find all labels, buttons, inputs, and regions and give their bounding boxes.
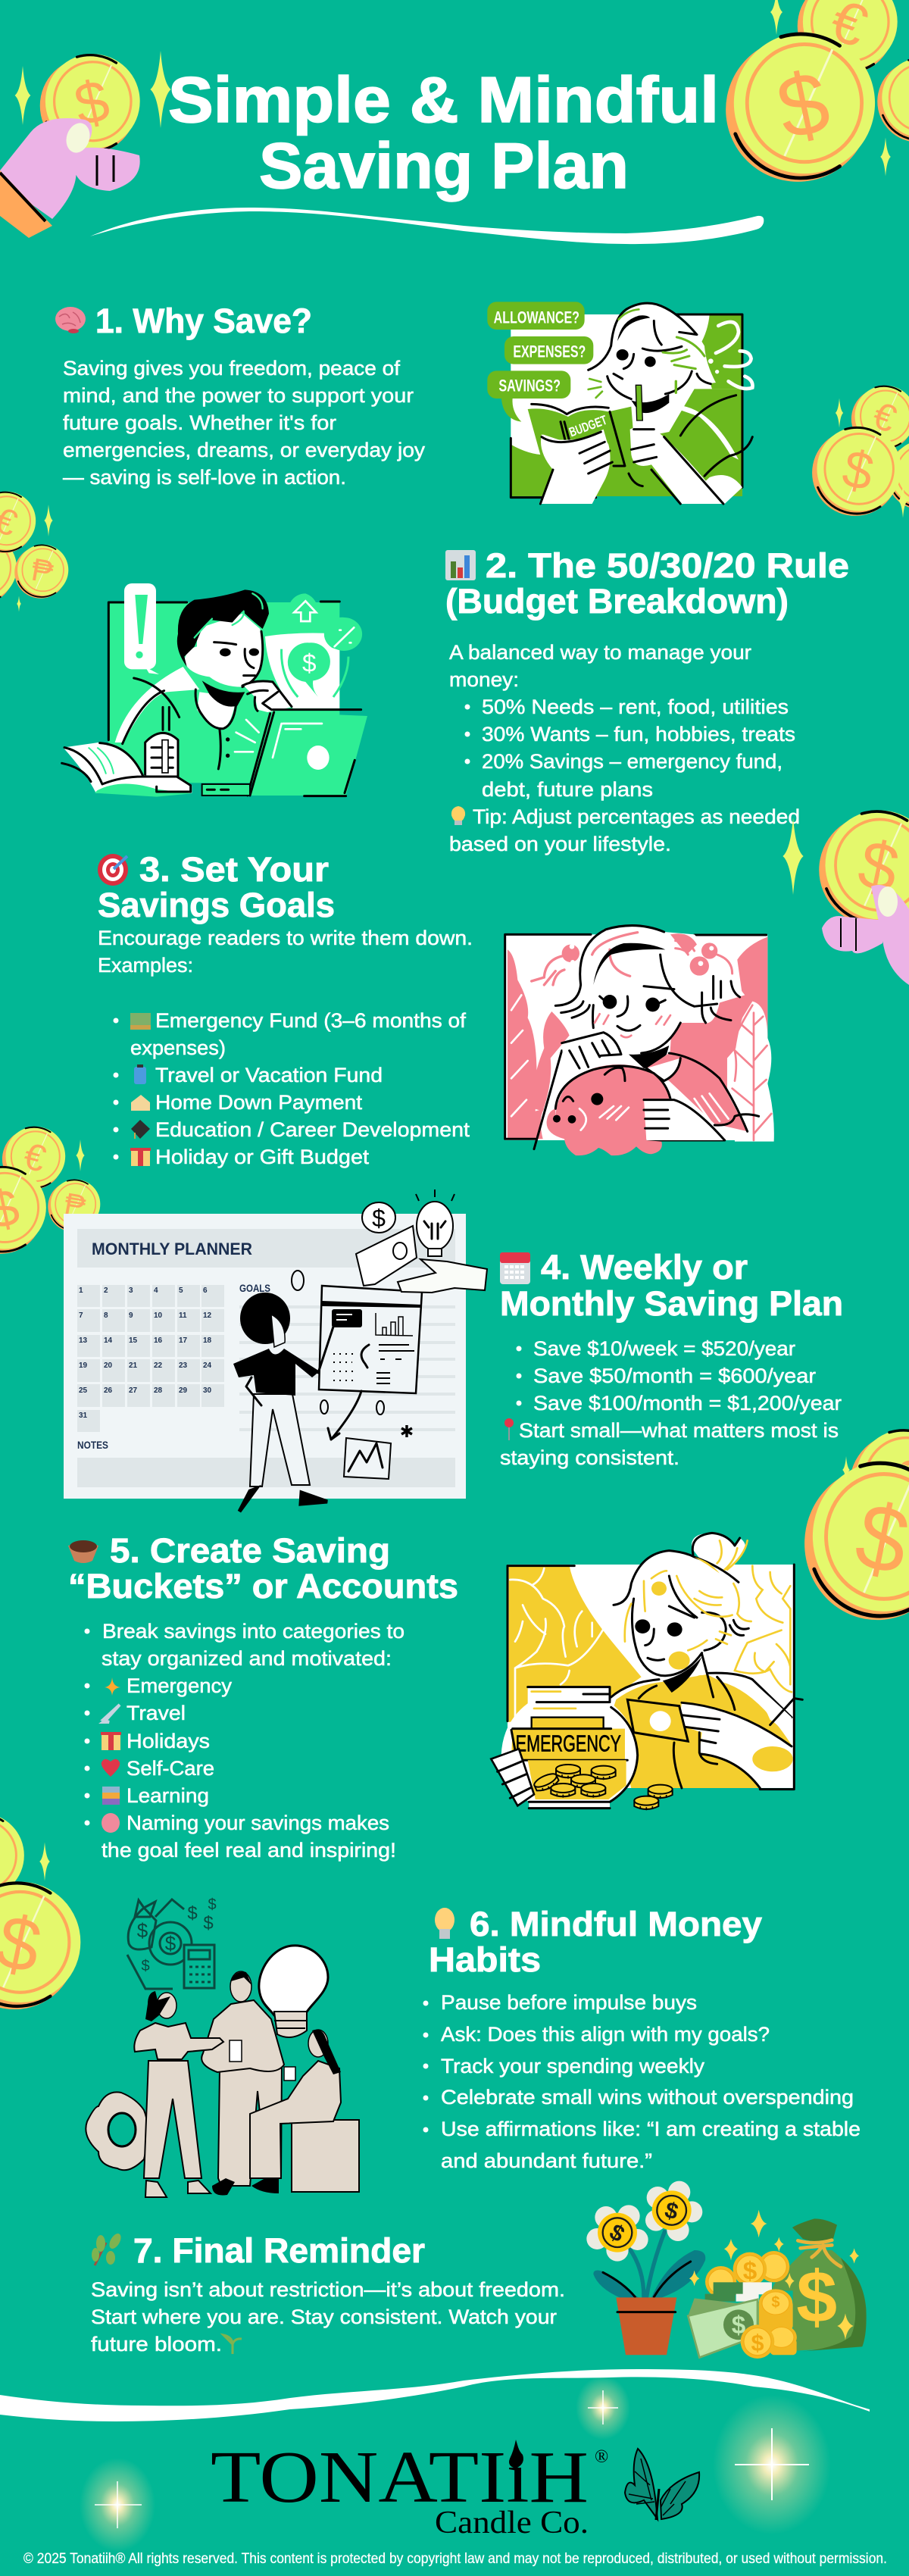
calendar numbers: 24 [203,1361,212,1370]
coins: right of section 5 [804,1429,909,1620]
head [555,925,745,1068]
monthly planner card [64,1214,466,1499]
icon: target [98,854,128,886]
coins: top left with hand: $ [69,67,114,139]
section 5: saving buckets [68,1531,458,1862]
list: Emergency [127,1674,233,1697]
body text: future goals. Whether it's for [63,411,336,434]
head [614,1533,751,1697]
notes [77,1439,455,1487]
calendar numbers: 3 [129,1286,133,1295]
gold coins and bills: $ [751,2331,764,2356]
gold coins and bills: $ [771,2294,780,2311]
calendar numbers: 28 [154,1386,163,1395]
list: Learning [127,1784,209,1807]
list: Ask: Does this align with my goals? [441,2023,770,2046]
calendar numbers: 13 [79,1336,88,1345]
calendar numbers: 21 [129,1361,138,1370]
body text and list [449,641,800,855]
money icons [127,1896,217,1989]
flowers: $ [662,2197,681,2225]
heading [500,1248,843,1323]
calendar numbers: 5 [179,1286,183,1295]
body text and list: money: [449,668,519,691]
heading [429,1905,762,1979]
section 7: final reminder [91,2231,565,2356]
hand [242,680,292,712]
calendar numbers: 25 [79,1386,88,1395]
heading: Habits [429,1940,541,1979]
calendar numbers: 23 [179,1361,188,1370]
section 4: weekly or monthly plan [500,1248,843,1469]
book: BUDGET [567,412,609,439]
calendar numbers: 6 [203,1286,208,1295]
coins: left of section 4 [0,1127,100,1254]
body text and list: based on your lifestyle. [449,833,671,855]
illustration: woman presenting chart [233,1190,487,1512]
glow: left [80,2458,155,2552]
heading: 7. Final Reminder [133,2231,425,2270]
chart panel [319,1286,422,1393]
piggy bank [534,1051,670,1155]
money icons: $ [187,1903,198,1924]
speech bubble: expenses: EXPENSES? [513,342,586,361]
illustration: woman with piggy bank [505,925,774,1155]
illustration: three people and light bulb [86,1896,359,2197]
body text: emergencies, dreams, or everyday joy [63,439,426,461]
icon: calendar [500,1252,530,1284]
calendar numbers: 20 [104,1361,113,1370]
coins: right of section 1 [812,386,909,518]
speech bubble: savings: SAVINGS? [498,377,561,395]
bill [627,1699,688,1741]
icon: light bulb [435,1908,454,1939]
calendar numbers: 30 [203,1386,212,1395]
goals list [114,1009,470,1168]
light bulb [259,1946,328,2037]
hair and face [591,303,716,399]
list: stay organized and motivated: [102,1647,392,1670]
money bag: $ [796,2257,837,2338]
gold coins and bills: $ [732,2312,746,2340]
body text and list: 30% Wants – fun, hobbies, treats [482,723,795,746]
calendar numbers: 15 [129,1336,138,1345]
body text and list: 50% Needs – rent, food, utilities [482,696,789,718]
list: Track your spending weekly [441,2055,705,2077]
calendar numbers [79,1286,212,1420]
calendar numbers: 11 [179,1311,187,1320]
calendar numbers: 31 [79,1411,88,1420]
calendar numbers: 10 [154,1311,163,1320]
seated woman [250,2030,341,2178]
body text [91,2278,565,2356]
list: Use affirmations like: “I am creating a stable [441,2118,861,2140]
icon: butterfly [625,2449,699,2520]
body text: Encourage readers to write them down. [98,927,473,949]
calendar numbers: 22 [154,1361,163,1370]
calendar numbers: 27 [129,1386,138,1395]
dollar coin and bulb [362,1190,454,1256]
heading: “Buckets” or Accounts [68,1567,458,1605]
flowers: $ [605,2219,629,2247]
goals list: Holiday or Gift Budget [155,1146,370,1168]
book [528,404,636,470]
body text and list: debt, future plans [482,778,653,801]
list: the goal feel real and inspiring! [102,1839,396,1862]
heading: 1. Why Save? [95,302,312,340]
background foliage [508,937,774,1142]
title: Saving Plan [259,130,629,202]
heading: 4. Weekly or [541,1248,748,1286]
wordmark: TONATIiH [211,2437,589,2518]
goals list: Travel or Vacation Fund [155,1064,383,1086]
background trees [509,1566,792,1722]
icon: bar chart [445,550,476,580]
calendar grid [77,1285,224,1432]
money icons: $ [165,1932,176,1955]
shirt lines [680,395,752,476]
flame [509,2440,523,2468]
white hand [398,1259,487,1293]
body text: future bloom. [91,2333,222,2356]
body text: Start where you are. Stay consistent. Watch your [91,2306,557,2328]
section 6: mindful money habits [423,1905,861,2172]
jar label: EMERGENCY [516,1731,621,1757]
illustration: woman reading budget book [487,302,753,504]
calendar numbers: 9 [129,1311,133,1320]
speech bubble: allowance [487,302,585,330]
list: Naming your savings makes [127,1812,389,1834]
illustration: money flowers, coins and bag [586,2181,867,2359]
coins: left of section 2: ₱ [29,552,56,590]
flower pot [616,2297,676,2355]
dollar coin and bulb: $ [372,1205,386,1232]
list: and abundant future.” [441,2149,652,2172]
gear [86,2092,148,2170]
body text [98,927,473,977]
heading: (Budget Breakdown) [445,582,789,621]
coins: top right: $ [769,52,837,158]
illustration: woman with emergency jar [491,1533,802,1810]
body text and list: A balanced way to manage your [449,641,751,664]
icon: brain [55,307,86,333]
calendar numbers: 14 [104,1336,113,1345]
list [85,1620,405,1862]
heading: 6. Mindful Money [470,1905,762,1943]
money icons: $ [208,1896,217,1913]
section 2: 50/30/20 rule [445,546,849,855]
coins: left of section 4: € [19,1135,50,1180]
bubbles [282,593,362,697]
calendar numbers: 12 [203,1311,212,1320]
body text: Saving gives you freedom, peace of [63,357,401,380]
goals list: Education / Career Development [155,1118,470,1141]
glow: right [713,2395,831,2534]
title swoosh [90,208,764,244]
jar [491,1687,638,1809]
heading [445,546,849,621]
body text: Saving isn’t about restriction—it’s about freedom. [91,2278,565,2301]
laptop [202,710,367,796]
coins: top left with hand [0,51,171,238]
heading [68,1531,458,1605]
notes: NOTES [77,1439,108,1451]
loose coins [648,1785,673,1799]
exclamation bubble [124,583,159,674]
goals list: Emergency Fund (3–6 months of [155,1009,467,1032]
pencil [636,385,642,420]
calendar numbers: 17 [179,1336,188,1345]
calendar numbers: 7 [79,1311,83,1320]
body text: Examples: [98,954,193,977]
calendar numbers: 16 [154,1336,163,1345]
sparkles [689,2210,859,2286]
flowers [586,2181,705,2298]
gold coins and bills: $ [743,2257,758,2285]
list: Pause before impulse buys [441,1991,697,2014]
body text [63,357,426,489]
heading [98,850,335,924]
shirt [646,1053,748,1131]
left woman [134,1991,223,2197]
coins: right of section 3 with hand: $ [852,826,905,908]
illustration: man at laptop [62,583,367,797]
coins: top right [726,0,909,182]
arrow and small chart: ✱ [400,1422,414,1441]
calendar numbers: 19 [79,1361,88,1370]
calendar numbers: 8 [104,1311,108,1320]
box seat [292,2120,359,2192]
money icons: $ [137,1919,148,1942]
list: staying consistent. [500,1446,679,1469]
heading: 3. Set Your [139,850,329,889]
list: Save $10/week = $520/year [533,1337,795,1360]
section 1: why save [55,302,426,489]
money icons: $ [141,1958,150,1974]
coins: left of section 6 [0,1813,80,2009]
speech bubble: allowance: ALLOWANCE? [494,308,579,327]
title: Simple & Mindful [168,64,719,136]
gold coins and bills [688,2251,797,2359]
body text and list: 20% Savings – emergency fund, [482,750,782,773]
hands [539,432,611,504]
calendar numbers: 1 [79,1286,83,1295]
man [201,1971,284,2196]
section 3: savings goals [98,850,473,1168]
list: Travel [127,1702,186,1724]
list: Break savings into categories to [102,1620,405,1643]
glow: top [576,2376,630,2440]
bills [356,1226,417,1286]
calendar numbers: 4 [154,1286,158,1295]
goals list: Home Down Payment [155,1091,363,1114]
list: Start small—what matters most is [519,1419,839,1442]
calendar numbers: 26 [104,1386,113,1395]
logo [211,2437,608,2540]
calendar numbers: 2 [104,1286,108,1295]
coins: right of section 1: $ [838,438,879,502]
woman figure [233,1293,335,1512]
coins: left of section 2 [0,492,68,612]
goals heading and lines [239,1282,455,1431]
goals list: expenses) [130,1036,226,1059]
list [500,1337,842,1469]
list: Celebrate small wins without overspending [441,2086,854,2109]
heading: 5. Create Saving [110,1531,390,1570]
icon: basket [68,1540,98,1563]
list: Save $100/month = $1,200/year [533,1392,842,1415]
head and hair [177,589,269,769]
body text: — saving is self-love in action. [63,466,346,489]
registered mark: ® [595,2447,608,2467]
question marks [716,322,753,389]
list [423,1991,861,2172]
money bag [771,2218,867,2352]
calendar numbers: 29 [179,1386,188,1395]
coins: right of section 3 with hand [782,811,909,985]
heading: Savings Goals [98,886,335,924]
speech bubble: savings [487,370,570,422]
heading: Monthly Saving Plan [500,1284,843,1323]
speech bubble: expenses [504,336,593,364]
title [168,64,719,202]
goals heading and lines: GOALS [239,1282,270,1294]
list: Self-Care [127,1757,214,1780]
coins: right of section 1: € [867,393,902,441]
coins: left of section 4: ₱ [62,1186,88,1224]
arm and hand [679,1702,793,1788]
heading: 2. The 50/30/20 Rule [486,546,849,585]
arrow and small chart [292,1271,414,1479]
body text and list: Tip: Adjust percentages as needed [473,805,800,828]
list: Save $50/month = $600/year [533,1365,816,1387]
calendar numbers: 18 [203,1336,212,1345]
hand on coin [562,1032,621,1074]
book and inkwell [62,707,192,797]
body text: mind, and the power to support your [63,384,414,407]
planner title: MONTHLY PLANNER [92,1240,252,1258]
bottom swoosh [0,2369,870,2421]
tagline: Candle Co. [435,2506,589,2540]
bubbles: $ [302,650,317,678]
money icons: $ [203,1913,214,1934]
list: Holidays [127,1730,210,1752]
icon: herb [92,2231,123,2265]
right hand [644,1099,725,1140]
body [611,1674,792,1788]
